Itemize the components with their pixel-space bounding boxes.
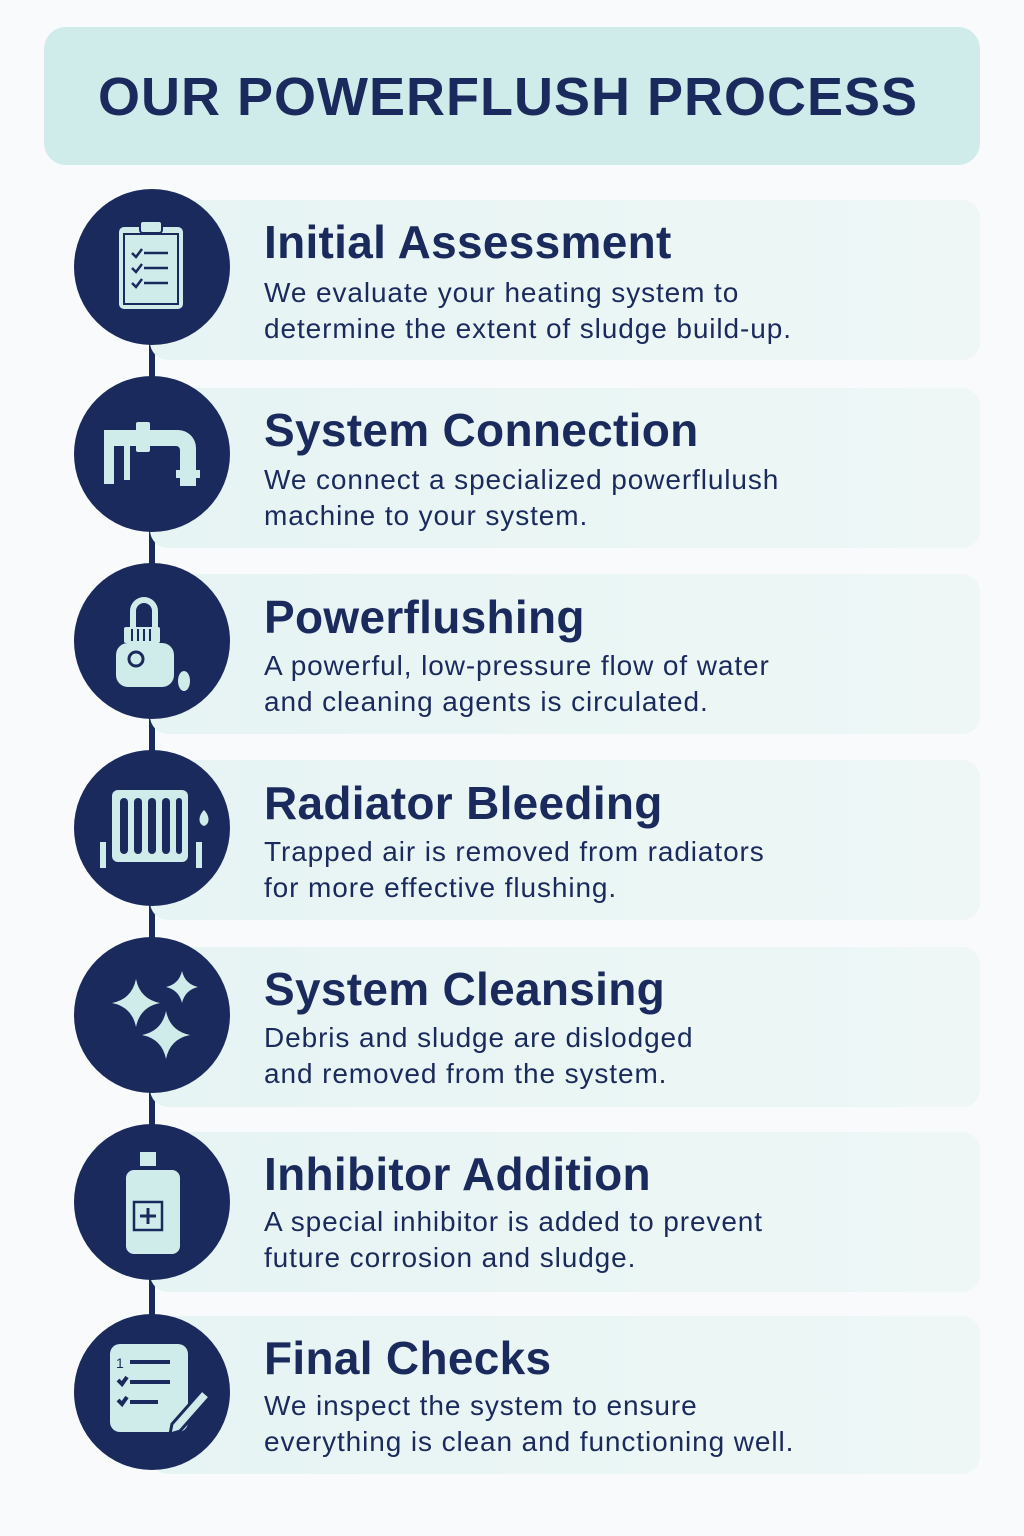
text: step 7: We inspect the system to ensure <box>264 1390 698 1421</box>
card: step 7 <box>150 1316 980 1474</box>
text: step 6: future corrosion and sludge. <box>264 1242 636 1273</box>
text: step 2: We connect a specialized powerflulush <box>264 464 779 495</box>
card: step 2 <box>150 388 980 548</box>
text: step 1 <box>264 277 792 344</box>
text: step 3 <box>264 650 770 717</box>
text: step 5: Debris and sludge are dislodged <box>264 1022 694 1053</box>
card: step 3 <box>150 574 980 734</box>
heading: step 2: System Connection <box>264 404 699 456</box>
text: step 6: A special inhibitor is added to prevent <box>264 1206 763 1237</box>
text: step 4: Trapped air is removed from radiators <box>264 836 765 867</box>
text: step 4: for more effective flushing. <box>264 872 617 903</box>
card: step 5 <box>150 947 980 1107</box>
card: step 6 <box>150 1132 980 1292</box>
heading: step 6: Inhibitor Addition <box>264 1148 651 1200</box>
heading: step 1: Initial Assessment <box>264 216 672 268</box>
icon: inhibitor bottle <box>74 1124 230 1280</box>
text: step 5: and removed from the system. <box>264 1058 667 1089</box>
icon: flush machine <box>74 563 230 719</box>
title: OUR POWERFLUSH PROCESS <box>98 67 918 127</box>
text: step 2: machine to your system. <box>264 500 588 531</box>
icon: sparkles <box>74 937 230 1093</box>
heading: step 3: Powerflushing <box>264 591 585 643</box>
icon: clipboard <box>74 189 230 345</box>
text: step 3: and cleaning agents is circulated. <box>264 686 709 717</box>
text: step 4 <box>264 836 765 903</box>
heading: step 7: Final Checks <box>264 1332 551 1384</box>
icon: checklist with pencil: 1 <box>116 1355 124 1371</box>
card: step 4 <box>150 760 980 920</box>
heading: step 4: Radiator Bleeding <box>264 777 663 829</box>
timeline connector <box>149 270 155 1390</box>
heading: step 5: System Cleansing <box>264 963 665 1015</box>
text: step 2 <box>264 464 779 531</box>
text: step 1: determine the extent of sludge build-up. <box>264 313 792 344</box>
icon: pipe <box>74 376 230 532</box>
text: step 7 <box>264 1390 794 1457</box>
text: step 7: everything is clean and functioning well. <box>264 1426 794 1457</box>
icon: checklist with pencil <box>74 1314 230 1470</box>
text: step 6 <box>264 1206 763 1273</box>
title <box>44 27 980 165</box>
icon: radiator <box>74 750 230 906</box>
text: step 3: A powerful, low-pressure flow of water <box>264 650 770 681</box>
text: step 1: We evaluate your heating system to <box>264 277 739 308</box>
text: step 5 <box>264 1022 694 1089</box>
card: step 1 <box>150 200 980 360</box>
